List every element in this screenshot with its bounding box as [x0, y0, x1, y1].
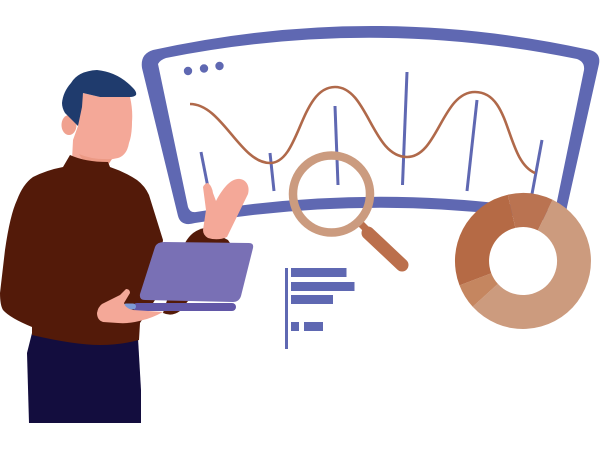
neck and face [72, 93, 132, 164]
laptop screen [140, 242, 253, 302]
sweater [0, 155, 163, 345]
chart: wave line [190, 87, 535, 173]
hair [62, 70, 136, 126]
chin shadow [79, 154, 112, 165]
chart: horizontal bar chart [285, 268, 354, 349]
chart: vertical bars [201, 72, 542, 194]
panel: curved monitor frame [142, 26, 599, 224]
icon: magnifying glass [293, 156, 402, 265]
raised hand [203, 179, 249, 239]
ear [62, 115, 76, 135]
icon: three window dots [184, 62, 224, 75]
laptop base [133, 303, 236, 311]
laptop base highlight [123, 304, 136, 310]
far arm [163, 228, 232, 315]
figure: man with laptop [0, 70, 253, 423]
holding hand [97, 289, 163, 323]
trousers [27, 333, 141, 423]
chart: donut [455, 193, 591, 329]
